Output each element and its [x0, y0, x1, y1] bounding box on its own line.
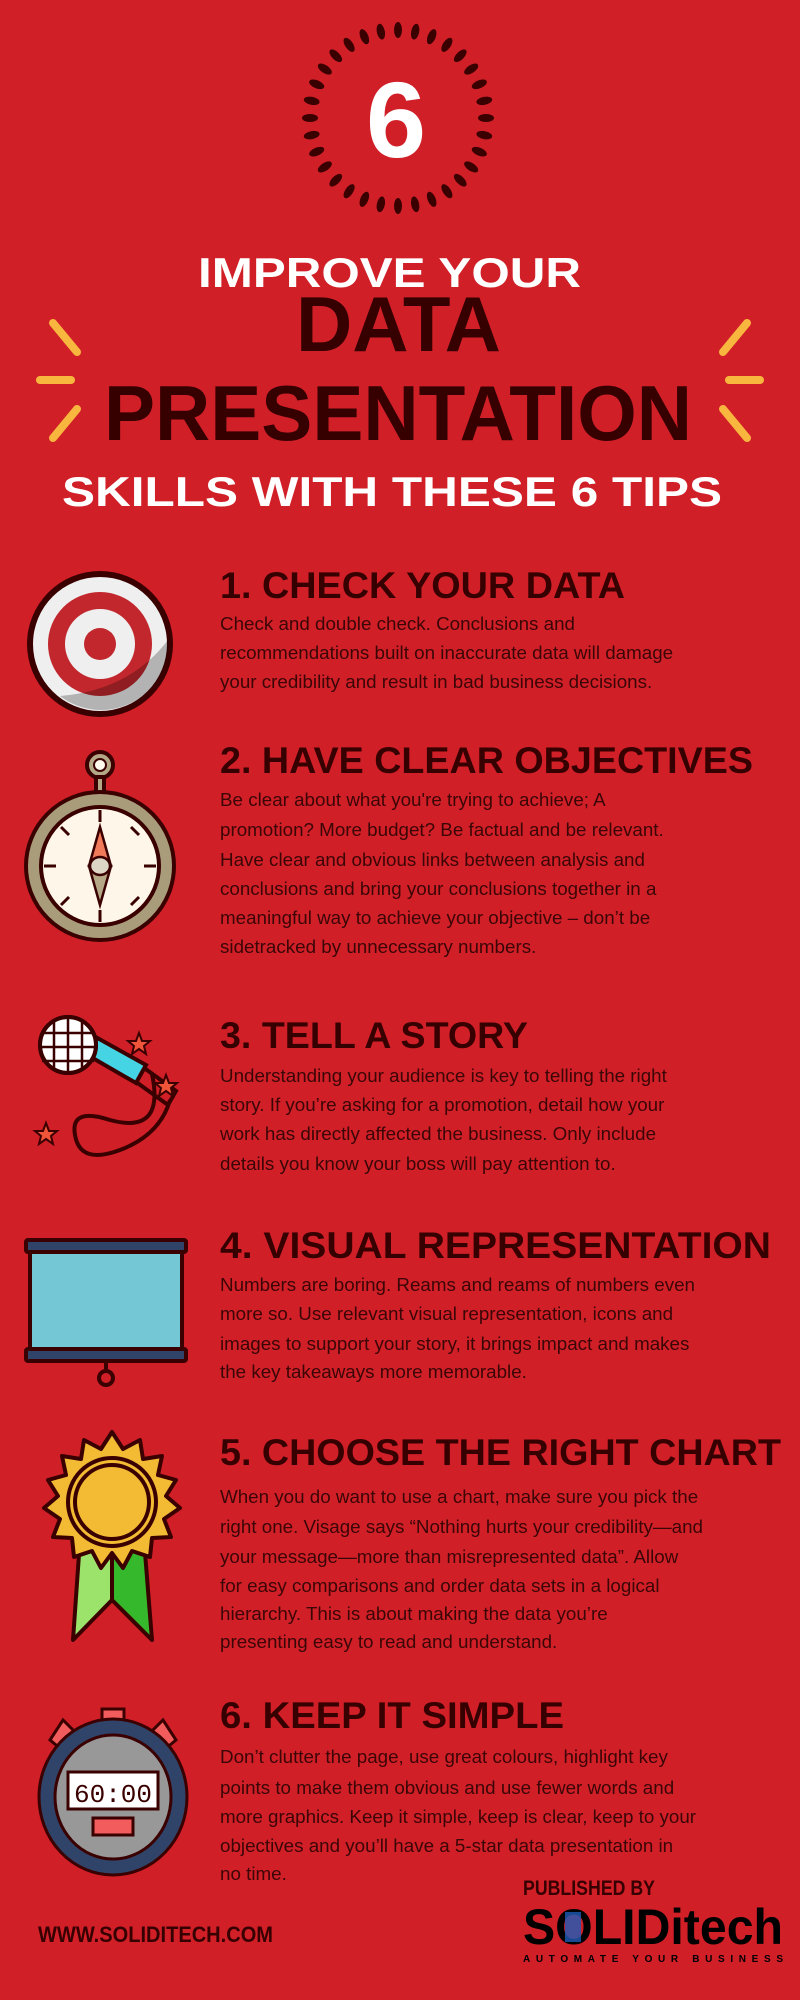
icon: target [27, 571, 173, 717]
title: IMPROVE YOUR [198, 249, 581, 296]
text 1: Check and double check. Conclusions and [220, 613, 575, 634]
title [62, 249, 722, 515]
heading 1: 1. CHECK YOUR DATA [220, 565, 625, 606]
text 1: your credibility and result in bad business decisions. [220, 671, 652, 692]
publisher logo: AUTOMATE YOUR BUSINESS [523, 1954, 783, 1965]
text 2: Be clear about what you're trying to achieve; A [220, 789, 606, 810]
icon: award ribbon [44, 1432, 180, 1640]
text 1: recommendations built on inaccurate data will damage [220, 642, 673, 663]
text 5: your message—more than misrepresented data”. Allow [220, 1546, 679, 1567]
text 6: no time. [220, 1863, 287, 1884]
publisher logo: SOLIDitech [523, 1899, 783, 1955]
text 4: images to support your story, it brings impact and makes [220, 1333, 689, 1354]
icon: compass [26, 752, 174, 940]
icon: stopwatch [39, 1709, 187, 1875]
decorative yellow bursts [40, 323, 760, 438]
text 4: more so. Use relevant visual representation, icons and [220, 1303, 673, 1324]
icon: stopwatch: 60:00 [74, 1780, 152, 1810]
text 3: work has directly affected the business. Only include [219, 1123, 656, 1144]
text 4: Numbers are boring. Reams and reams of numbers even [220, 1274, 695, 1295]
heading 5: 5. CHOOSE THE RIGHT CHART [220, 1432, 781, 1473]
text 5: for easy comparisons and order data sets in a logical [220, 1575, 660, 1596]
icon: microphone [40, 1017, 176, 1155]
icon: stars [35, 1033, 177, 1144]
text 2: Have clear and obvious links between analysis and [220, 849, 645, 870]
text 3: story. If you’re asking for a promotion, detail how your [220, 1094, 664, 1115]
text 3: Understanding your audience is key to telling the right [220, 1065, 668, 1086]
text 2: sidetracked by unnecessary numbers. [220, 936, 536, 957]
heading 3: 3. TELL A STORY [220, 1015, 528, 1056]
text 5: hierarchy. This is about making the data you’re [220, 1603, 608, 1624]
text 4: the key takeaways more memorable. [220, 1361, 527, 1382]
text 5: presenting easy to read and understand. [220, 1631, 557, 1652]
footer url: WWW.SOLIDITECH.COM [38, 1922, 273, 1947]
text 5: When you do want to use a chart, make sure you pick the [220, 1486, 698, 1507]
text 6: more graphics. Keep it simple, keep is clear, keep to your [220, 1806, 696, 1827]
heading 6: 6. KEEP IT SIMPLE [220, 1695, 564, 1736]
text 2: promotion? More budget? Be factual and be relevant. [220, 819, 664, 840]
icon: projector screen [26, 1240, 186, 1385]
heading 4: 4. VISUAL REPRESENTATION [220, 1225, 771, 1266]
text 6: objectives and you’ll have a 5-star data presentation in [220, 1835, 673, 1856]
title: DATA [296, 280, 501, 368]
publisher logo [523, 1877, 783, 1965]
text 2: conclusions and bring your conclusions together in a [220, 878, 657, 899]
badge: number 6 in drop ring: 6 [366, 59, 426, 180]
publisher logo: PUBLISHED BY [523, 1877, 655, 1900]
text 6: Don’t clutter the page, use great colours, highlight key [220, 1746, 668, 1767]
text 2: meaningful way to achieve your objective – don’t be [220, 907, 650, 928]
text 3: details you know your boss will pay attention to. [220, 1153, 616, 1174]
title: SKILLS WITH THESE 6 TIPS [62, 468, 722, 515]
text 6: points to make them obvious and use fewer words and [220, 1777, 674, 1798]
title: PRESENTATION [104, 369, 692, 457]
text 5: right one. Visage says “Nothing hurts your credibility—and [220, 1516, 703, 1537]
heading 2: 2. HAVE CLEAR OBJECTIVES [220, 740, 753, 781]
badge: number 6 in drop ring [302, 22, 494, 214]
